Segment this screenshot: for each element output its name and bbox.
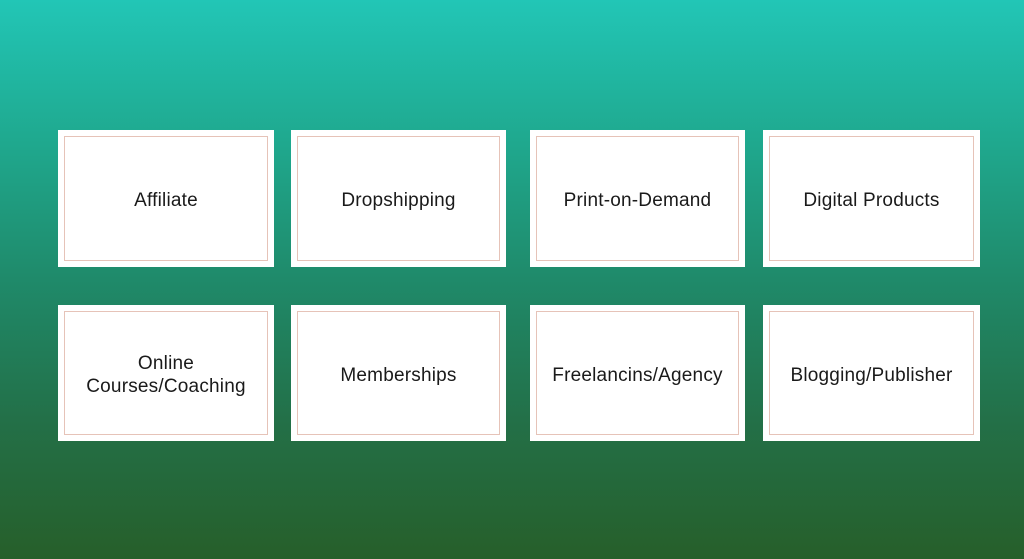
card: Blogging/Publisher: Blogging/Publisher [790, 364, 953, 386]
card: Digital Products [763, 130, 980, 267]
card: Online Courses/Coaching: Courses/Coaching [86, 376, 246, 397]
card: Memberships [291, 305, 506, 441]
card: Online Courses/Coaching: Online [138, 353, 194, 374]
card: Dropshipping: Dropshipping [341, 190, 456, 211]
card: Affiliate: Affiliate [134, 190, 198, 211]
card: Print-on-Demand: Print-on-Demand [564, 190, 711, 211]
card: Digital Products: Digital Products [803, 190, 940, 211]
card: Affiliate [58, 130, 274, 267]
card: Freelancins/Agency [530, 305, 745, 441]
card: Dropshipping [291, 130, 506, 267]
card: Print-on-Demand [530, 130, 745, 267]
card: Blogging/Publisher [763, 305, 980, 441]
card: Memberships: Memberships [340, 364, 457, 386]
card: Freelancins/Agency: Freelancins/Agency [552, 364, 723, 386]
card: Online Courses/Coaching [58, 305, 274, 441]
